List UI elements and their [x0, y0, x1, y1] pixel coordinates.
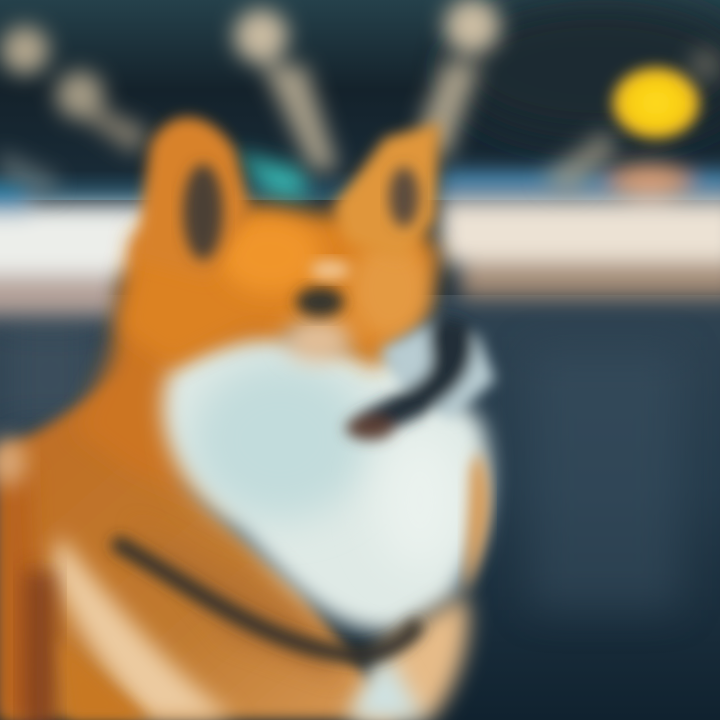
- dog: neck fur: [75, 230, 300, 520]
- background: bright horizon band: [0, 152, 720, 315]
- dog: left ear: [135, 117, 250, 280]
- dog: snout and nose: [345, 318, 495, 440]
- decorative light streaks and orbs: [0, 0, 720, 198]
- dog: white chest fur: [163, 340, 489, 720]
- background: dark sky: [0, 0, 720, 200]
- background: dark slate ground: [0, 295, 720, 720]
- icon: yellow sun: [612, 67, 700, 139]
- dog: body fur: [0, 380, 400, 720]
- dog: right ear: [335, 122, 440, 260]
- dog: collar: [120, 545, 415, 655]
- dog: head: [120, 185, 440, 370]
